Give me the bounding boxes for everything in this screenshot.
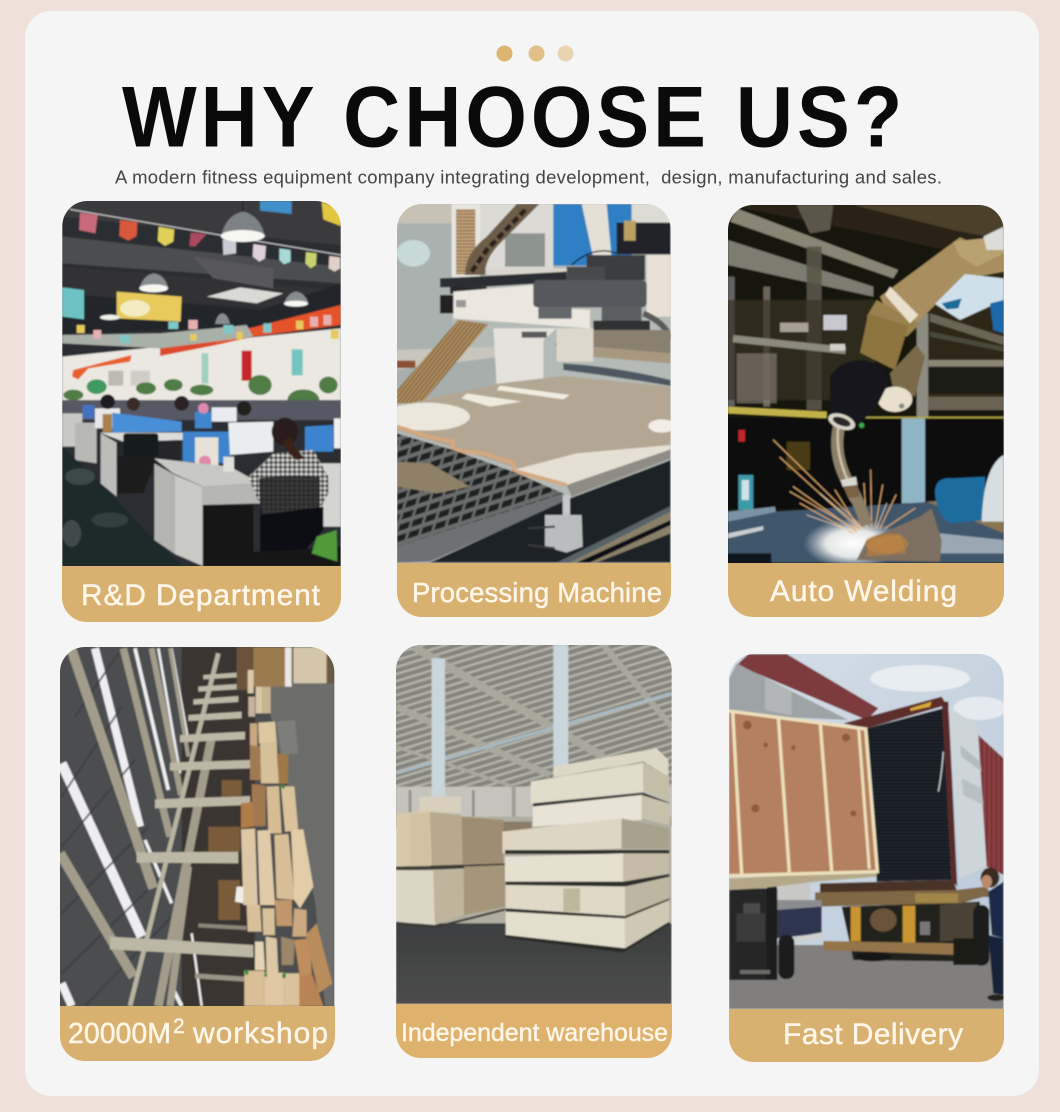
- panel: Processing Machine: [383, 200, 680, 617]
- label: Auto Welding: [728, 563, 1004, 617]
- label: Processing Machine: Processing Machine: [412, 577, 662, 608]
- label: Fast Delivery: Fast Delivery: [783, 1018, 963, 1051]
- label: 20000M2 workshop: 2: [173, 1015, 185, 1038]
- label: 20000M2 workshop: workshop: [192, 1017, 328, 1050]
- label: 20000M2 workshop: 20000M: [68, 1018, 171, 1050]
- panel: Auto Welding: [720, 200, 1010, 617]
- subtitle: A modern fitness equipment company integrating development, design, manufacturing and sales.: [115, 166, 942, 188]
- photo: workshop interior rotated: [55, 640, 345, 1010]
- three decorative dots: [496, 46, 574, 62]
- photo: loading shipping container: [720, 645, 1010, 1015]
- panel: 20000M2 workshop: [55, 640, 345, 1061]
- label: Processing Machine: [397, 563, 671, 617]
- title: WHY CHOOSE US?: [122, 68, 902, 165]
- panel: Independent warehouse: [390, 640, 680, 1058]
- panel: R&D Department: [60, 200, 350, 622]
- label: Auto Welding: Auto Welding: [770, 575, 957, 608]
- label: R&D Department: [62, 566, 341, 622]
- photo: open-plan office: [60, 200, 350, 570]
- label: 20000M2 workshop: [60, 1006, 335, 1061]
- photo: CNC machine: [397, 204, 671, 563]
- label: R&D Department: R&D Department: [81, 579, 321, 612]
- label: Independent warehouse: Independent warehouse: [401, 1019, 668, 1047]
- label: Independent warehouse: [396, 1004, 672, 1058]
- panel: Fast Delivery: [720, 645, 1010, 1062]
- photo: warehouse with crates: [390, 640, 680, 1004]
- photo: welding robot: [720, 200, 1010, 570]
- label: Fast Delivery: [729, 1009, 1004, 1062]
